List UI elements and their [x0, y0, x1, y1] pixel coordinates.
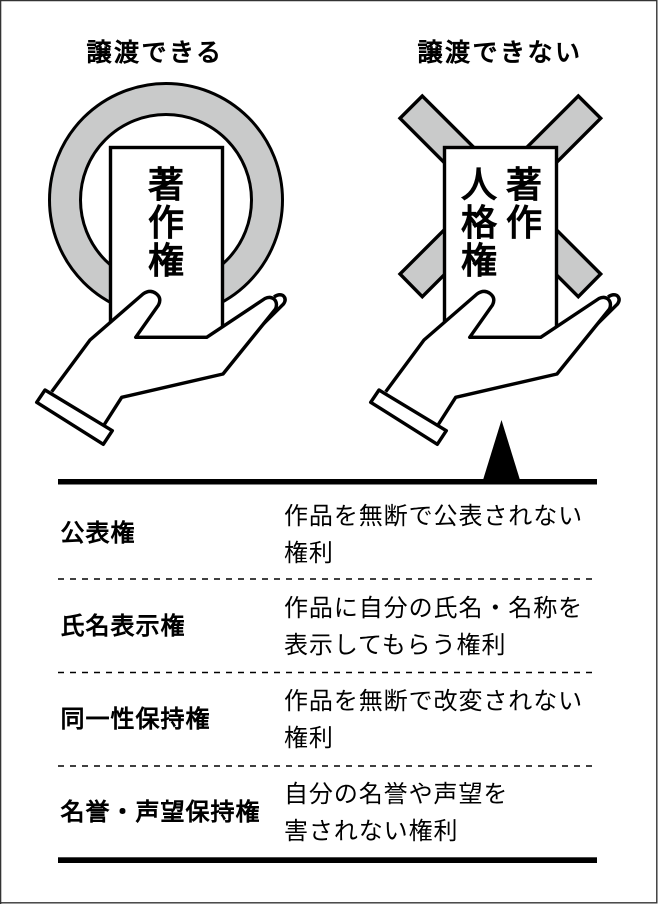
card text: moral rights: 権: [461, 240, 497, 281]
table bottom rule: [58, 857, 597, 863]
heading: transferable: 譲渡できる: [86, 39, 224, 67]
illustration: non-transferable moral right in hand: [371, 96, 619, 444]
row: honor and reputation right: 自分の名誉や声望を: [284, 781, 508, 808]
table top rule: [58, 479, 597, 484]
row: attribution right: 作品に自分の氏名・名称を: [284, 595, 583, 622]
card text: moral rights: 格: [461, 202, 497, 243]
row: public release right: 権利: [284, 540, 334, 567]
row: honor and reputation right: [60, 781, 508, 845]
row: integrity right: 権利: [284, 725, 334, 752]
card text: moral rights: 作: [506, 202, 542, 243]
card text: moral rights: [461, 164, 542, 281]
card: moral rights: [444, 148, 556, 338]
row: attribution right: 表示してもらう権利: [284, 632, 506, 659]
row: public release right: [60, 503, 583, 567]
card text: copyright: 作: [148, 202, 184, 243]
row: attribution right: 氏名表示権: [60, 613, 186, 640]
icon: hand: [371, 291, 619, 444]
icon: cross mark: [400, 96, 601, 297]
row: public release right: 作品を無断で公表されない: [284, 503, 583, 530]
icon: pointer triangle: [483, 420, 520, 480]
row: public release right: 公表権: [60, 520, 136, 547]
row: attribution right: [60, 595, 583, 659]
card text: copyright: 権: [148, 240, 184, 281]
icon: hand: [37, 291, 285, 444]
card: copyright: [110, 148, 222, 338]
row: integrity right: [60, 688, 583, 752]
icon: circle mark: [65, 99, 267, 301]
row: honor and reputation right: 害されない権利: [284, 818, 458, 845]
card text: copyright: 著: [148, 164, 184, 205]
card text: moral rights: 著: [506, 164, 542, 205]
card text: moral rights: 人: [461, 164, 497, 205]
row: honor and reputation right: 名誉・声望保持権: [60, 799, 260, 826]
row: integrity right: 同一性保持権: [60, 706, 210, 733]
heading: not transferable: 譲渡できない: [418, 39, 583, 67]
card text: copyright: [148, 164, 184, 281]
illustration: transferable copyright in hand: [37, 99, 285, 444]
row: integrity right: 作品を無断で改変されない: [284, 688, 583, 715]
